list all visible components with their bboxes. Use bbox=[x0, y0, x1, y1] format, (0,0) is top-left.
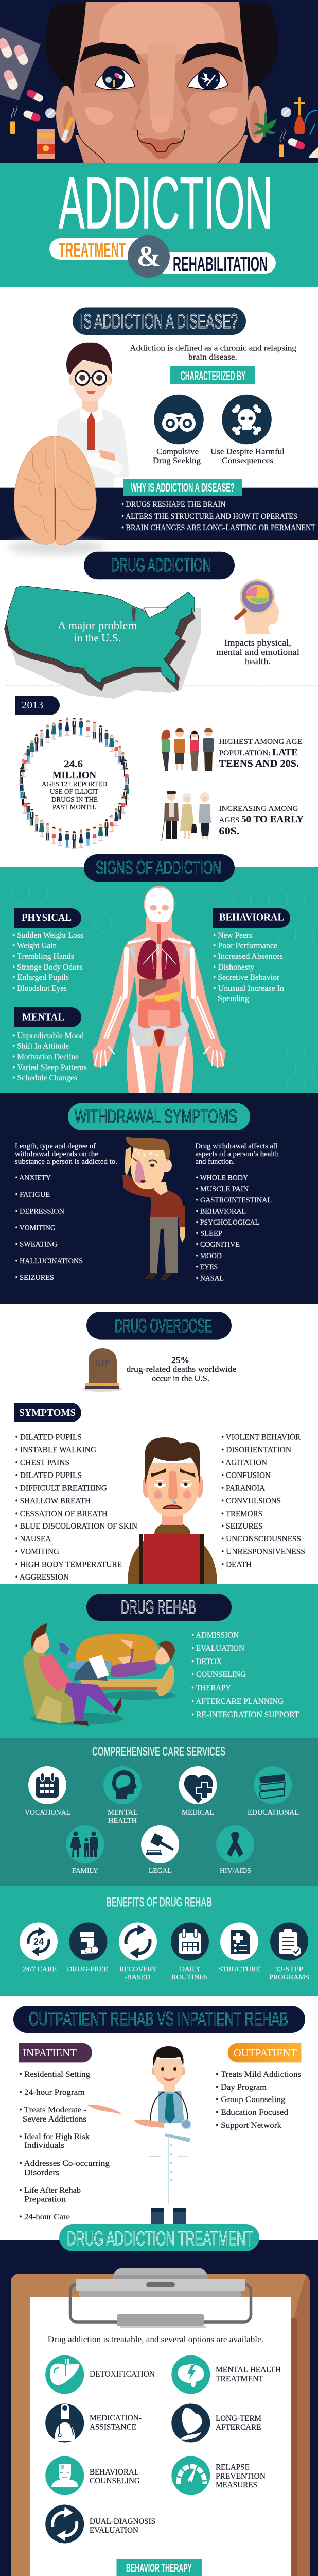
benefit labels: RECOVERY bbox=[119, 1965, 157, 1973]
tag: mental: MENTAL bbox=[22, 1012, 64, 1023]
list: outpatient: • Day Program bbox=[216, 2083, 267, 2092]
text: withdrawal intro right: aspects of a person’s health bbox=[196, 1150, 279, 1158]
ampersand badge: & bbox=[137, 241, 161, 273]
label: dual diagnosis evaluation: DUAL-DIAGNOSIS bbox=[90, 2517, 155, 2526]
list: rehab steps: • AFTERCARE PLANNING bbox=[191, 1697, 284, 1706]
list: behavioral signs: • Dishonesty bbox=[213, 963, 254, 972]
list: affected areas: • MUSCLE PAIN bbox=[196, 1185, 249, 1193]
list: withdrawal symptoms: • ANXIETY bbox=[15, 1174, 51, 1182]
icon: gauge bbox=[171, 2456, 210, 2495]
icon: nose bbox=[139, 138, 183, 159]
icon: checklist bbox=[270, 1923, 308, 1961]
service labels row one: VOCATIONAL bbox=[25, 1809, 70, 1817]
reasons list: • DRUGS RESHAPE THE BRAIN bbox=[121, 500, 225, 509]
text: highest among late teens bbox=[219, 738, 302, 769]
stat: 24.6 million: DRUGS IN THE bbox=[51, 796, 98, 804]
list: behavioral signs bbox=[213, 931, 284, 1003]
illustration: brain top view bbox=[8, 436, 105, 554]
uterus bbox=[154, 1029, 164, 1047]
list: inpatient: • Addresses Co-occurring bbox=[19, 2159, 110, 2168]
heading pill: DRUG ADDICTION bbox=[111, 554, 211, 575]
list: behavioral signs: • Secretive Behavior bbox=[213, 973, 280, 982]
heading pill bbox=[84, 854, 235, 882]
stat: 24.6 million: PAST MONTH. bbox=[52, 804, 96, 811]
heading pill bbox=[84, 552, 235, 579]
label: relapse prevention measures bbox=[216, 2463, 266, 2489]
subtitle pill: treatment bbox=[49, 238, 147, 262]
list: overdose symptoms left: • BLUE DISCOLORATION OF SKIN bbox=[15, 1522, 137, 1531]
illustration: young adults bbox=[161, 728, 214, 771]
stat: 25 percent: 25% bbox=[171, 1355, 189, 1366]
panel: comprehensive care services bbox=[0, 1738, 318, 1886]
forehead highlight bbox=[99, 2, 225, 54]
text: increasing among 50 to early 60s: INCREASING AMONG bbox=[219, 805, 298, 813]
definition text: brain disease. bbox=[188, 353, 237, 362]
icon: mental health head bbox=[103, 1766, 142, 1804]
impact text: Impacts physical, bbox=[224, 638, 291, 648]
icon captions: Use Despite Harmful bbox=[210, 448, 285, 456]
icon: face bbox=[74, 2, 248, 163]
label: behavioral counseling: COUNSELING bbox=[90, 2477, 140, 2485]
text: highest among late teens: TEENS AND 20S. bbox=[219, 758, 299, 769]
band: why is addiction a disease bbox=[0, 479, 318, 540]
list: overdose symptoms left: • CESSATION OF BREATH bbox=[15, 1510, 108, 1518]
section: signs of addiction bbox=[0, 854, 318, 1097]
map: USA bbox=[4, 586, 201, 699]
benefit labels: PROGRAMS bbox=[269, 1974, 309, 1981]
illustration: older adults bbox=[162, 791, 211, 841]
label: characterized by bbox=[170, 366, 255, 384]
heading pill: DRUG OVERDOSE bbox=[115, 1315, 212, 1336]
tag: behavioral bbox=[213, 908, 290, 928]
icon: heart in hand bbox=[171, 2404, 210, 2442]
icon: skull and crossbones bbox=[222, 395, 272, 444]
map caption: A major problem bbox=[58, 619, 137, 632]
list: affected areas: • NASAL bbox=[196, 1275, 224, 1283]
title panel bbox=[0, 162, 318, 287]
list: overdose symptoms right: • CONFUSION bbox=[221, 1471, 271, 1480]
section: withdrawal symptoms bbox=[0, 1093, 318, 1304]
people ring bbox=[19, 717, 130, 849]
list: overdose symptoms left bbox=[15, 1433, 137, 1582]
icon: hiv ribbon bbox=[216, 1825, 254, 1863]
list: rehab steps: • THERAPY bbox=[191, 1684, 231, 1692]
section: drug addiction treatment bbox=[0, 2224, 318, 2576]
ampersand badge bbox=[128, 235, 170, 278]
text: increasing among 50 to early 60s: 60S. bbox=[219, 826, 240, 837]
list: overdose symptoms left: • DIFFICULT BREATHING bbox=[15, 1484, 107, 1493]
text: withdrawal intro right: and function. bbox=[196, 1158, 235, 1166]
list: outpatient: • Treats Mild Addictions bbox=[216, 2070, 301, 2079]
service labels row one: MENTAL bbox=[108, 1809, 138, 1817]
text: withdrawal intro right: Drug withdrawal affects all bbox=[196, 1142, 277, 1150]
list: affected areas: • EYES bbox=[196, 1263, 218, 1272]
text: withdrawal intro right bbox=[196, 1142, 279, 1166]
icon: 24 hour cycle: 24 bbox=[33, 1937, 44, 1947]
list: overdose symptoms right: • SEIZURES bbox=[221, 1522, 262, 1531]
list: overdose symptoms left: • DILATED PUPILS bbox=[15, 1433, 82, 1442]
icon: education books bbox=[254, 1766, 292, 1804]
list: withdrawal symptoms: • FATIGUE bbox=[15, 1191, 50, 1199]
service labels row one: EDUCATIONAL bbox=[248, 1809, 299, 1817]
list: mental signs bbox=[12, 1031, 87, 1082]
list: affected areas: • GASTROINTESTINAL bbox=[196, 1196, 272, 1205]
reasons list: • ALTERS THE STRUCTURE AND HOW IT OPERATES bbox=[121, 512, 297, 521]
icon captions bbox=[153, 448, 285, 465]
text: withdrawal intro left: substance a person is addicted to. bbox=[15, 1158, 117, 1166]
text: increasing among 50 to early 60s: AGES bbox=[219, 816, 240, 824]
text: increasing among 50 to early 60s bbox=[219, 805, 304, 837]
list: mental signs: • Schedule Changes bbox=[12, 1074, 77, 1082]
icon: cigarette butt bbox=[61, 116, 74, 141]
tag: physical: PHYSICAL bbox=[22, 912, 72, 923]
heading pill bbox=[68, 1103, 250, 1130]
list: behavioral signs: • Increased Absences bbox=[213, 952, 283, 961]
list: rehab steps: • ADMISSION bbox=[191, 1631, 239, 1639]
list: withdrawal symptoms: • SWEATING bbox=[15, 1241, 58, 1249]
list: withdrawal symptoms: • VOMITING bbox=[15, 1224, 56, 1232]
list: physical signs: • Trembling Hands bbox=[12, 952, 74, 961]
icon: pill bottle bbox=[69, 1923, 107, 1961]
list: rehab steps: • COUNSELING bbox=[191, 1670, 246, 1679]
benefit labels: ROUTINES bbox=[171, 1974, 208, 1981]
lungs bbox=[137, 924, 180, 980]
list: overdose symptoms right: • VIOLENT BEHAVIOR bbox=[221, 1433, 301, 1442]
map caption: in the U.S. bbox=[74, 632, 121, 644]
heading pill: DRUG REHAB bbox=[121, 1597, 196, 1618]
stat: 24.6 million: AGES 12+ REPORTED bbox=[42, 781, 107, 788]
label: behavior therapy bbox=[116, 2559, 202, 2576]
list: mental signs: • Shift In Attitude bbox=[12, 1042, 69, 1051]
label: dual diagnosis evaluation: EVALUATION bbox=[90, 2526, 138, 2535]
text: withdrawal intro left bbox=[15, 1142, 117, 1166]
stat: 25 percent: drug-related deaths worldwide bbox=[127, 1365, 237, 1374]
icon: powder pile bbox=[309, 147, 318, 158]
section: outpatient vs inpatient bbox=[13, 2006, 305, 2225]
list: rehab steps: • EVALUATION bbox=[191, 1644, 244, 1653]
list: affected areas bbox=[196, 1174, 272, 1283]
icon captions: Compulsive bbox=[156, 448, 199, 456]
tag: mental bbox=[14, 1007, 81, 1027]
icon: vocational calendar bbox=[28, 1766, 66, 1804]
benefit labels: DRUG-FREE bbox=[67, 1965, 108, 1973]
section: drug addiction bbox=[4, 552, 317, 699]
icon: staring eyes bbox=[154, 395, 204, 444]
list: withdrawal symptoms: • DEPRESSION bbox=[15, 1208, 65, 1216]
stomach and liver bbox=[154, 979, 180, 998]
list: physical signs: • Bloodshot Eyes bbox=[12, 984, 67, 993]
illustration: man with headache bbox=[122, 1137, 185, 1280]
list: withdrawal symptoms: • HALLUCINATIONS bbox=[15, 1257, 83, 1265]
icon: hookah bbox=[294, 97, 317, 135]
benefit labels: STRUCTURE bbox=[218, 1965, 260, 1973]
label: dual diagnosis evaluation bbox=[90, 2517, 155, 2535]
list: overdose symptoms right: • UNRESPONSIVENESS bbox=[221, 1548, 305, 1556]
list: inpatient: • Life After Rehab bbox=[19, 2186, 81, 2195]
year tag bbox=[15, 696, 60, 715]
icon: family bbox=[66, 1825, 104, 1863]
label: characterized by: CHARACTERIZED BY bbox=[181, 369, 245, 383]
text: highest among late teens: LATE bbox=[272, 747, 298, 758]
list: affected areas: • SLEEP bbox=[196, 1230, 222, 1238]
text: increasing among 50 to early 60s: 50 TO EARLY bbox=[241, 814, 304, 825]
panel: benefits of drug rehab bbox=[0, 1886, 318, 1996]
service labels row two bbox=[72, 1867, 251, 1875]
list: behavioral signs: • New Peers bbox=[213, 931, 252, 940]
icon: behavioral counseling head bbox=[45, 2456, 84, 2495]
list: rehab steps bbox=[191, 1631, 299, 1719]
subtitle pill: rehabilitation bbox=[154, 252, 276, 276]
heading pill bbox=[86, 1312, 232, 1340]
list: inpatient: • Residential Setting bbox=[19, 2070, 90, 2079]
stat: 24.6 million bbox=[42, 759, 107, 811]
list: mental signs: • Motivation Decline bbox=[12, 1053, 79, 1061]
list: affected areas: • PSYCHOLOGICAL bbox=[196, 1218, 259, 1227]
list: overdose symptoms right: • DISORIENTATION bbox=[221, 1446, 291, 1454]
label: behavioral counseling: BEHAVIORAL bbox=[90, 2468, 139, 2477]
tag: inpatient bbox=[19, 2043, 92, 2062]
list: mental signs: • Varied Sleep Patterns bbox=[12, 1063, 87, 1072]
list: overdose symptoms left: • DILATED PUPILS bbox=[15, 1471, 82, 1480]
intestines bbox=[138, 998, 181, 1028]
stat: 25 percent: occur in the U.S. bbox=[152, 1375, 209, 1383]
list: inpatient bbox=[19, 2070, 110, 2222]
service labels row one bbox=[25, 1809, 299, 1825]
subtitle pill: treatment: TREATMENT bbox=[59, 238, 126, 262]
icon: cigarette stubs bbox=[10, 106, 286, 157]
text: withdrawal intro left: Length, type and degree of bbox=[15, 1142, 96, 1150]
list: inpatient: Individuals bbox=[24, 2141, 64, 2150]
icon: loose pills bbox=[23, 89, 306, 150]
label: relapse prevention measures: PREVENTION bbox=[216, 2472, 266, 2481]
list: affected areas: • BEHAVIORAL bbox=[196, 1208, 246, 1216]
list: affected areas: • COGNITIVE bbox=[196, 1241, 240, 1249]
list: overdose symptoms right: • CONVULSIONS bbox=[221, 1497, 281, 1505]
list: outpatient bbox=[216, 2070, 301, 2130]
benefit labels: DAILY bbox=[180, 1965, 201, 1973]
list: overdose symptoms right: • PARANOIA bbox=[221, 1484, 265, 1493]
label bbox=[123, 479, 242, 496]
heading pill bbox=[73, 307, 246, 335]
list: overdose symptoms left: • NAUSEA bbox=[15, 1535, 51, 1544]
benefit labels: -BASED bbox=[125, 1974, 150, 1981]
benefit labels bbox=[23, 1965, 309, 1981]
list: physical signs: • Sudden Weight Loss bbox=[12, 931, 83, 940]
list: withdrawal symptoms: • SEIZURES bbox=[15, 1274, 54, 1282]
list: inpatient: • 24-hour Care bbox=[19, 2213, 70, 2222]
service labels row one: MEDICAL bbox=[182, 1809, 214, 1817]
map caption bbox=[58, 619, 137, 644]
list: inpatient: • 24-hour Program bbox=[19, 2088, 85, 2097]
list: overdose symptoms left: • INSTABLE WALKING bbox=[15, 1446, 96, 1454]
benefit labels: 12-STEP bbox=[275, 1965, 303, 1973]
label: mental health treatment: MENTAL HEALTH bbox=[216, 2366, 281, 2374]
icon: blister pack bbox=[0, 27, 41, 100]
tag: physical bbox=[14, 908, 81, 928]
list: rehab steps: • RE-INTEGRATION SUPPORT bbox=[191, 1710, 299, 1719]
clipboard paper bbox=[30, 2297, 291, 2576]
stat: 24.6 million: 24.6 bbox=[64, 759, 83, 770]
list: outpatient: • Group Counseling bbox=[216, 2095, 285, 2104]
heading: BENEFITS OF DRUG REHAB bbox=[106, 1895, 212, 1910]
list: overdose symptoms left: • AGGRESSION bbox=[15, 1573, 69, 1582]
icon: brain with bolt bbox=[171, 2355, 210, 2394]
icon captions: Consequences bbox=[222, 456, 273, 465]
heading pill bbox=[59, 2224, 259, 2251]
list: outpatient: • Education Focused bbox=[216, 2108, 288, 2117]
service labels row one: HEALTH bbox=[108, 1817, 137, 1825]
icon: eyebrows bbox=[79, 42, 243, 65]
icon: doctor bbox=[45, 2404, 84, 2442]
icon captions: Drug Seeking bbox=[153, 456, 201, 465]
label: mental health treatment bbox=[216, 2366, 281, 2383]
tag: symptoms: SYMPTOMS bbox=[19, 1407, 76, 1418]
service labels row two: HIV/AIDS bbox=[220, 1867, 251, 1875]
section: is addiction a disease bbox=[0, 307, 318, 554]
icon: medical document bbox=[220, 1923, 258, 1961]
icon: medical heart bbox=[179, 1766, 217, 1804]
illustration: overdosing man bbox=[128, 1437, 217, 1584]
icon: cheeks bbox=[85, 107, 238, 125]
label: relapse prevention measures: MEASURES bbox=[216, 2481, 257, 2489]
label: behavior therapy: BEHAVIOR THERAPY bbox=[126, 2561, 192, 2574]
tag: symptoms bbox=[14, 1403, 81, 1422]
label: long-term aftercare: AFTERCARE bbox=[216, 2423, 261, 2432]
icon: detox liver bbox=[45, 2355, 84, 2394]
list: inpatient: Disorders bbox=[24, 2168, 59, 2177]
list: overdose symptoms left: • HIGH BODY TEMPERATURE bbox=[15, 1560, 122, 1569]
definition text: Addiction is defined as a chronic and relapsing bbox=[130, 344, 296, 353]
icon: neck and ears bbox=[56, 86, 267, 163]
tag: behavioral: BEHAVIORAL bbox=[219, 912, 284, 923]
section: drug overdose bbox=[14, 1312, 305, 1584]
icon: recovery cycle bbox=[119, 1923, 157, 1961]
list: withdrawal symptoms bbox=[15, 1174, 83, 1282]
list: overdose symptoms right bbox=[221, 1433, 305, 1569]
stat: 25 percent bbox=[127, 1355, 237, 1383]
skull bbox=[144, 886, 175, 923]
heading pill: WITHDRAWAL SYMPTOMS bbox=[75, 1106, 237, 1127]
impact text: health. bbox=[245, 656, 271, 666]
illustration: anatomical body bbox=[92, 886, 226, 1093]
stat: 24.6 million: MILLION bbox=[52, 770, 97, 781]
label: medication assistance bbox=[90, 2414, 142, 2432]
text: highest among late teens: HIGHEST AMONG AGE bbox=[219, 738, 302, 746]
list: behavioral signs: Spending bbox=[218, 994, 249, 1003]
icon: tombstone bbox=[82, 1348, 122, 1392]
impact text bbox=[216, 638, 299, 666]
list: affected areas: • MOOD bbox=[196, 1252, 222, 1260]
service labels row two: FAMILY bbox=[72, 1867, 98, 1875]
list: physical signs: • Enlarged Pupils bbox=[12, 973, 69, 982]
impact text: mental and emotional bbox=[216, 647, 299, 657]
label: detoxification: DETOXIFICATION bbox=[90, 2370, 155, 2379]
eye sockets and nose shading bbox=[79, 54, 244, 135]
label: long-term aftercare: LONG-TERM bbox=[216, 2414, 261, 2423]
illustration: therapist and patient on couch bbox=[23, 1623, 176, 1726]
tag: inpatient: INPATIENT bbox=[23, 2047, 77, 2059]
pelvis bbox=[129, 1012, 189, 1046]
reasons list bbox=[121, 500, 315, 532]
label: relapse prevention measures: RELAPSE bbox=[216, 2463, 250, 2472]
list: overdose symptoms right: • TREMORS bbox=[221, 1510, 262, 1518]
list: physical signs: • Weight Gain bbox=[12, 941, 57, 950]
section: 2013 statistics bbox=[15, 696, 304, 849]
label: WHY IS ADDICTION A DISEASE? bbox=[131, 481, 235, 494]
hero banner: face with drug items bbox=[0, 0, 318, 163]
list: overdose symptoms right: • DEATH bbox=[221, 1560, 252, 1569]
list: overdose symptoms left: • SHALLOW BREATH bbox=[15, 1497, 91, 1505]
list: physical signs: • Strange Body Odors bbox=[12, 963, 82, 972]
benefit labels: 24/7 CARE bbox=[23, 1965, 57, 1973]
icon: daily calendar bbox=[171, 1923, 209, 1961]
list: overdose symptoms right: • UNCONSCIOUSNESS bbox=[221, 1535, 301, 1544]
clipboard clip bbox=[70, 2268, 251, 2328]
list: mental signs: • Unpredictable Mood bbox=[12, 1031, 84, 1040]
list: inpatient: Preparation bbox=[24, 2195, 66, 2204]
icon: left eye bbox=[95, 66, 135, 90]
label: behavioral counseling bbox=[90, 2468, 140, 2485]
list: affected areas: • WHOLE BODY bbox=[196, 1174, 249, 1182]
clipboard board bbox=[11, 2274, 310, 2576]
list: overdose symptoms right: • AGITATION bbox=[221, 1459, 267, 1467]
heading: COMPREHENSIVE CARE SERVICES bbox=[92, 1744, 225, 1759]
bones bbox=[95, 939, 223, 1093]
text: highest among late teens: POPULATION: bbox=[219, 749, 271, 757]
icon: dual diagnosis cycle bbox=[45, 2505, 84, 2543]
list: inpatient: • Treats Moderate - bbox=[19, 2106, 86, 2114]
icon: tombstone: RIP bbox=[95, 1358, 110, 1368]
stat: 24.6 million: USE OF ILLICIT bbox=[50, 788, 98, 796]
icon: cigarette pack bbox=[37, 129, 55, 159]
heading pill bbox=[86, 1594, 232, 1621]
list: overdose symptoms left: • CHEST PAINS bbox=[15, 1459, 69, 1467]
intro text: Drug addiction is treatable, and several options are available. bbox=[48, 2335, 263, 2344]
list: behavioral signs: • Poor Performance bbox=[213, 941, 277, 950]
section: drug rehab bbox=[0, 1584, 318, 1738]
list: physical signs bbox=[12, 931, 83, 993]
label: medication assistance: MEDICATION- bbox=[90, 2414, 142, 2422]
tag: outpatient: OUTPATIENT bbox=[234, 2047, 297, 2059]
icon: head with brain under magnifier bbox=[233, 580, 279, 634]
text: withdrawal intro left: withdrawal depends on the bbox=[15, 1150, 98, 1158]
label: mental health treatment: TREATMENT bbox=[216, 2375, 264, 2383]
list: overdose symptoms left: • VOMITING bbox=[15, 1548, 59, 1556]
icon: right eye bbox=[187, 67, 228, 90]
definition text bbox=[130, 344, 296, 362]
icon: legal gavel bbox=[141, 1825, 179, 1863]
illustration: doctor figure bbox=[56, 343, 129, 488]
label: long-term aftercare bbox=[216, 2414, 261, 2432]
list: rehab steps: • DETOX bbox=[191, 1657, 222, 1666]
icon: 24 hour cycle bbox=[20, 1923, 58, 1961]
year tag: 2013 bbox=[22, 700, 43, 711]
service labels row two: LEGAL bbox=[149, 1867, 172, 1875]
list: behavioral signs: • Unusual Increase In bbox=[213, 984, 284, 993]
list: inpatient: Severe Addictions bbox=[23, 2115, 86, 2124]
heading pill: SIGNS OF ADDICTION bbox=[96, 857, 221, 878]
icon: hair bbox=[45, 2, 278, 89]
illustration: doctor presenting bbox=[87, 2046, 191, 2225]
list: inpatient: • Ideal for High Risk bbox=[19, 2132, 90, 2141]
label: medication assistance: ASSISTANCE bbox=[90, 2422, 136, 2432]
icon: cannabis leaf bbox=[253, 109, 277, 137]
tag: outpatient bbox=[227, 2043, 302, 2062]
list: outpatient: • Support Network bbox=[216, 2121, 281, 2130]
